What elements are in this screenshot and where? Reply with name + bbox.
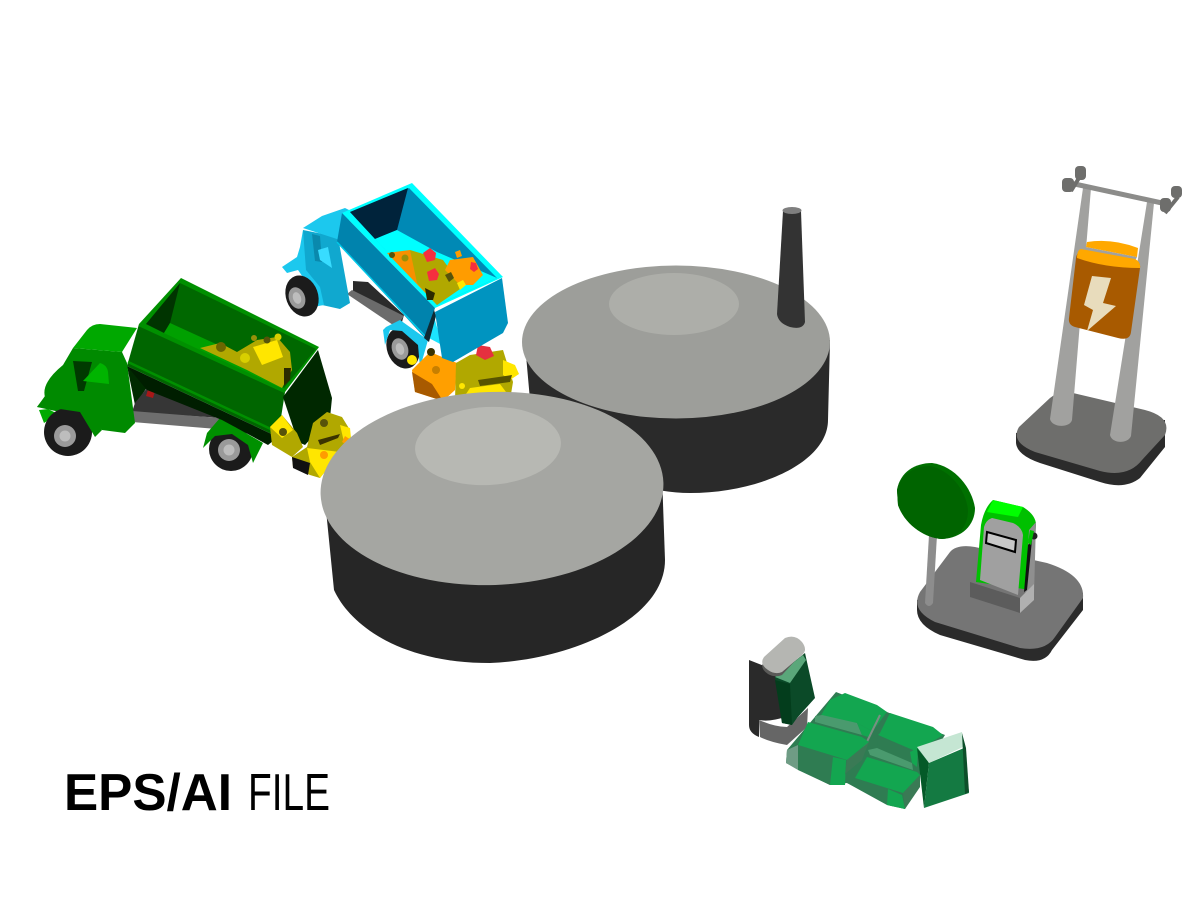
file format label	[64, 764, 330, 822]
chimney	[777, 207, 805, 328]
green truck tailgate	[283, 350, 332, 445]
pylon insulators	[1062, 166, 1182, 213]
blue truck bed	[337, 183, 503, 345]
green truck front wheel	[37, 396, 102, 456]
back digester tank	[522, 266, 830, 493]
bag front left	[786, 722, 869, 785]
waste load in green truck	[200, 334, 292, 388]
yellow waste pile	[270, 412, 351, 478]
blue truck cab	[282, 208, 353, 309]
green truck bed	[127, 278, 319, 445]
blue truck chassis	[347, 281, 404, 327]
green truck cab	[37, 324, 137, 433]
station base	[917, 546, 1083, 661]
file format label: FILE	[248, 764, 330, 822]
power pylon	[1016, 166, 1182, 485]
bag standing	[917, 732, 969, 808]
green truck chassis	[127, 366, 222, 429]
front digester tank	[317, 386, 667, 663]
canister cap	[762, 637, 805, 676]
waste load in blue truck	[387, 248, 483, 305]
lightning bolt icon	[1084, 276, 1116, 331]
blue truck front wheel	[280, 271, 324, 321]
blue truck tailgate	[435, 278, 508, 362]
orange waste pile	[407, 345, 519, 401]
charger unit	[970, 500, 1038, 613]
bag seams base	[786, 692, 945, 809]
transformer box	[1069, 241, 1140, 339]
bag back right	[858, 713, 943, 770]
blue dump truck	[280, 183, 503, 373]
pylon base	[1016, 393, 1166, 485]
bag front right	[847, 757, 920, 809]
bag back left	[815, 693, 887, 737]
blue truck rear wheel	[381, 320, 428, 373]
canister	[749, 637, 815, 745]
green dump truck	[37, 278, 332, 471]
green waste bags	[786, 692, 969, 809]
file format label: EPS/AI	[64, 764, 232, 822]
green truck rear wheel	[203, 418, 263, 471]
pylon crossbar	[1070, 183, 1162, 203]
pylon posts	[1050, 188, 1154, 442]
charging station	[897, 463, 1083, 661]
tree pole	[925, 535, 937, 606]
green bottle	[775, 653, 815, 725]
tree canopy	[897, 463, 975, 539]
